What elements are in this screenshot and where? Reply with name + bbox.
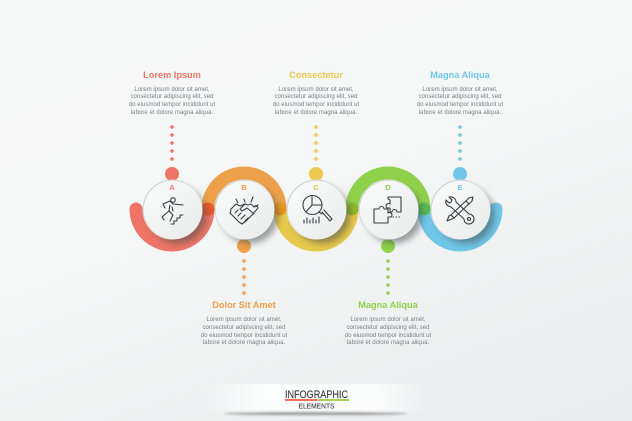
badge shadow [224,412,408,415]
text block D: consectetur adipiscing elit, sed [346,324,430,331]
badge: infographic elements: INFOGRAPHIC [285,389,348,401]
dotted connector D [386,259,390,295]
badge: infographic elements [285,389,349,410]
text block D: labore et dolore magna aliqua. [347,339,429,346]
dotted connector A [170,125,174,161]
text block B: labore et dolore magna aliqua. [203,339,285,346]
icon: running figure on stairs [162,198,183,224]
disc B: B [241,183,247,192]
badge background [205,384,427,413]
disc E: E [457,183,463,192]
text block D: Lorem ipsum dolor sit amet, [350,316,426,323]
dotted connector E [458,125,462,161]
icon: crossed wrench and screwdriver [446,197,474,224]
disc E [430,180,490,240]
text block A: consectetur adipiscing elit, sed [130,93,214,100]
heading: Dolor Sit Amet: Dolor Sit Amet [212,300,276,310]
text block C: labore et dolore magna aliqua. [275,109,357,116]
text block C: do eiusmod tempor incididunt ut [273,101,359,108]
badge: infographic elements: ELEMENTS [298,402,334,410]
text block B [201,316,288,346]
text block A: Lorem ipsum dolor sit amet, [134,86,210,92]
disc A [142,180,202,240]
text block E: labore et dolore magna aliqua. [419,109,501,116]
heading: Lorem Ipsum: Lorem Ipsum [143,70,201,80]
ribbon arcs [136,173,496,245]
text block D: do eiusmod tempor incididunt ut [345,332,431,338]
text block C: consectetur adipiscing elit, sed [274,93,358,100]
disc B [214,180,274,240]
text block D [345,316,432,346]
disc C: C [313,183,319,192]
heading: Magna Aliqua (E): Magna Aliqua [430,70,490,80]
text block E: consectetur adipiscing elit, sed [418,93,502,100]
heading: Consectetur: Consectetur [289,70,343,80]
disc C [286,180,346,240]
text block B: do eiusmod tempor incididunt ut [201,332,287,338]
disc D: D [385,183,391,192]
dotted connector B [242,259,246,295]
heading: Magna Aliqua (D): Magna Aliqua [358,300,418,310]
text block C: Lorem ipsum dolor sit amet, [278,86,354,92]
icon: handshake [230,197,258,224]
disc shadows [150,186,494,244]
dotted connector C [314,125,318,161]
text block B: consectetur adipiscing elit, sed [202,324,286,331]
disc A: A [169,183,175,192]
text block A: labore et dolore magna aliqua. [131,109,213,116]
text block C [273,86,360,116]
node dots [165,167,467,253]
text block A [129,86,216,116]
icon: puzzle pieces [374,197,401,223]
disc D [358,180,418,240]
text block E [417,86,504,116]
text block E: do eiusmod tempor incididunt ut [417,101,503,108]
text block A: do eiusmod tempor incididunt ut [129,101,215,108]
icon: magnifier with chart [303,196,332,223]
text block B: Lorem ipsum dolor sit amet, [206,316,282,323]
arc overlaps [202,202,430,216]
text block E: Lorem ipsum dolor sit amet, [422,86,498,92]
